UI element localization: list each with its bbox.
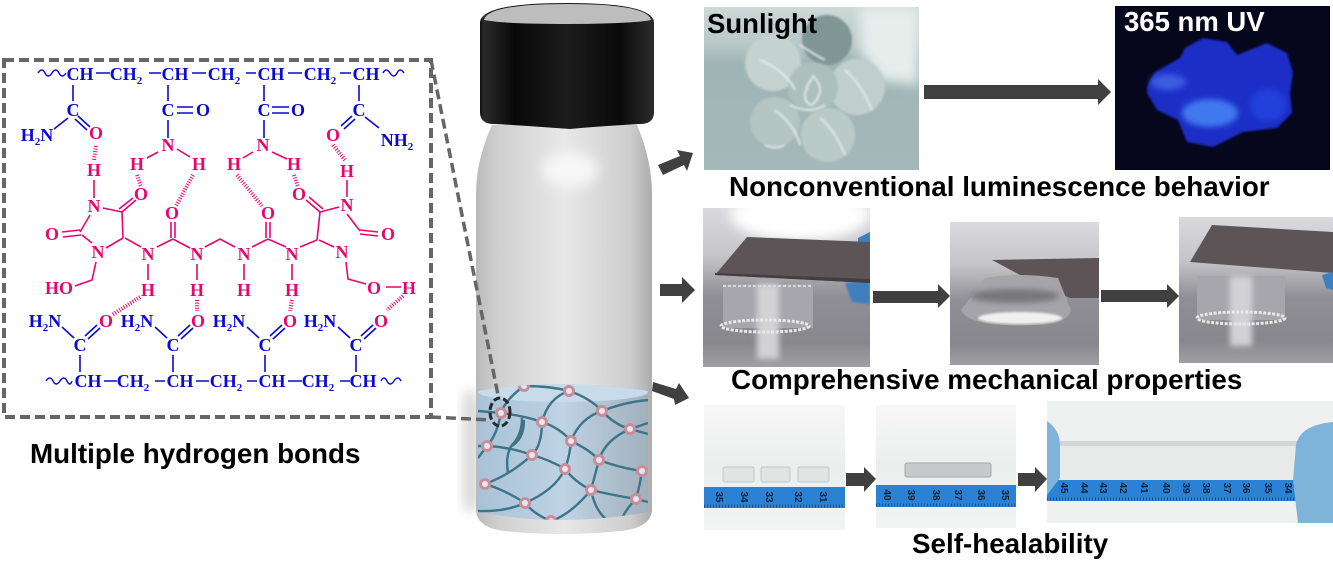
pink crosslinker with hydrogen bonds: O xyxy=(45,224,59,244)
blue upper polymer chain: 2 xyxy=(235,75,241,87)
pink crosslinker with hydrogen bonds: O xyxy=(165,203,179,223)
blue upper polymer chain: C xyxy=(66,100,80,120)
blue upper polymer chain: 2 xyxy=(137,75,143,87)
blue lower polymer chain: C xyxy=(166,335,180,355)
ruler strip: 35 xyxy=(1262,482,1273,494)
blue lower polymer chain: CH xyxy=(350,371,376,391)
blue upper polymer chain: C xyxy=(258,100,270,120)
ruler strip: 44 xyxy=(1078,482,1089,494)
ruler strip: 35 xyxy=(713,491,724,503)
ruler strip: 37 xyxy=(1221,482,1232,494)
ruler strip xyxy=(1047,480,1296,501)
ruler strip: 42 xyxy=(1117,482,1128,494)
blue lower polymer chain: CH xyxy=(210,371,237,391)
blue upper polymer chain: 2 xyxy=(331,75,337,87)
blue lower polymer chain: 2 xyxy=(144,382,150,394)
pink crosslinker with hydrogen bonds: H xyxy=(227,154,241,174)
ruler strip: 31 xyxy=(817,491,828,503)
blue lower polymer chain: O xyxy=(374,311,388,331)
label: sunlight: Sunlight xyxy=(707,8,817,39)
blue lower polymer chain: 2 xyxy=(43,322,49,334)
pink crosslinker with hydrogen bonds: N xyxy=(88,196,100,216)
ruler strip: 32 xyxy=(792,491,803,503)
blue lower polymer chain xyxy=(29,311,401,394)
blue upper polymer chain: 2 xyxy=(408,141,414,153)
blue lower polymer chain: H xyxy=(213,311,227,331)
blue lower polymer chain: 2 xyxy=(329,382,335,394)
bright backdrop xyxy=(860,7,919,85)
blue lower polymer chain: C xyxy=(74,335,86,355)
vial illustration xyxy=(464,3,654,534)
panel: self-healing photo 2 xyxy=(876,405,1016,528)
blue lower polymer chain: CH xyxy=(302,371,329,391)
pink crosslinker with hydrogen bonds: N xyxy=(256,135,270,155)
glowing flower xyxy=(1147,38,1293,147)
label: 365 nm UV: 365 nm UV xyxy=(1124,6,1265,37)
pink crosslinker with hydrogen bonds: N xyxy=(286,244,298,264)
pink crosslinker with hydrogen bonds: N xyxy=(162,135,174,155)
arrow: vial to self-healing xyxy=(652,382,689,405)
blue lower polymer chain: CH xyxy=(117,371,144,391)
arrow: vial to mechanical xyxy=(660,277,695,303)
flower detail strokes xyxy=(760,45,872,155)
arrow: healing 2 to 3 xyxy=(1018,467,1047,492)
blue lower polymer chain: H xyxy=(29,311,43,331)
blue lower polymer chain: H xyxy=(304,311,318,331)
pink crosslinker with hydrogen bonds: H xyxy=(340,161,354,181)
vial highlight xyxy=(542,152,598,188)
arrow: healing 1 to 2 xyxy=(846,467,876,492)
blue upper polymer chain: C xyxy=(162,100,174,120)
ruler strip: 34 xyxy=(738,491,749,503)
blue upper polymer chain: O xyxy=(196,100,210,120)
pink crosslinker with hydrogen bonds: O xyxy=(89,123,103,143)
ruler strip: 41 xyxy=(1138,482,1149,494)
ruler strip xyxy=(704,487,845,508)
ruler strip: 39 xyxy=(905,489,916,501)
ruler strip: 37 xyxy=(952,489,963,501)
panel: mechanical photo 3 xyxy=(1179,217,1333,363)
panel: self-healing photo 1 xyxy=(704,405,845,530)
vial shadow xyxy=(464,392,478,510)
blue lower polymer chain: N xyxy=(232,311,245,331)
heading: nonconventional luminescence behavior: Nonconventional luminescence behavior xyxy=(729,171,1270,202)
ruler strip: 40 xyxy=(1160,482,1171,494)
pink crosslinker with hydrogen bonds: H xyxy=(285,280,299,300)
ruler strip: 36 xyxy=(1240,482,1251,494)
hydrogel network xyxy=(478,378,648,528)
blue upper polymer chain: O xyxy=(291,100,305,120)
blue lower polymer chain: N xyxy=(140,311,153,331)
blue lower polymer chain: CH xyxy=(258,371,286,391)
blue upper polymer chain: CH xyxy=(208,64,235,84)
blue lower polymer chain: C xyxy=(350,335,362,355)
pink crosslinker with hydrogen bonds: O xyxy=(292,184,306,204)
ruler strip: 45 xyxy=(1058,482,1069,494)
pink crosslinker with hydrogen bonds: O xyxy=(134,184,148,204)
panel: sunlight photo xyxy=(704,7,919,170)
pink crosslinker with hydrogen bonds: H xyxy=(141,280,155,300)
pink crosslinker with hydrogen bonds: N xyxy=(238,244,250,264)
blue lower polymer chain: O xyxy=(191,311,205,331)
pink crosslinker with hydrogen bonds: H xyxy=(190,280,204,300)
ruler strip: 43 xyxy=(1097,482,1108,494)
blue lower polymer chain: 2 xyxy=(237,382,243,394)
blue upper polymer chain: H xyxy=(21,125,35,145)
pink crosslinker with hydrogen bonds: H xyxy=(237,280,251,300)
ruler strip: 38 xyxy=(930,489,941,501)
flower petals xyxy=(745,15,885,162)
ruler strip: 34 xyxy=(1282,482,1293,494)
callout lines to inset xyxy=(431,60,498,420)
blue upper polymer chain xyxy=(21,64,414,153)
blue upper polymer chain: C xyxy=(352,100,366,120)
blue lower polymer chain: C xyxy=(258,335,272,355)
heading: comprehensive mechanical properties: Comprehensive mechanical properties xyxy=(731,364,1242,395)
pink crosslinker with hydrogen bonds: N xyxy=(190,244,204,264)
blue lower polymer chain: CH xyxy=(74,371,102,391)
panel: mechanical photo 1 xyxy=(703,208,870,367)
blue upper polymer chain: 2 xyxy=(35,136,41,148)
ruler strip: 40 xyxy=(881,489,892,501)
arrow: sunlight to UV xyxy=(924,79,1111,105)
blue upper polymer chain: N xyxy=(40,125,53,145)
ruler strip: 33 xyxy=(763,491,774,503)
blue upper polymer chain: CH xyxy=(66,64,94,84)
heading: multiple hydrogen bonds: Multiple hydrogen bonds xyxy=(30,438,360,469)
arrow: mechanical 1 to 2 xyxy=(873,284,950,308)
pink crosslinker with hydrogen bonds: N xyxy=(336,242,348,262)
pink crosslinker with hydrogen bonds xyxy=(45,123,416,315)
dashed inset frame xyxy=(4,60,431,417)
pink crosslinker with hydrogen bonds: H xyxy=(402,278,416,298)
panel: mechanical photo 2 xyxy=(950,222,1099,365)
pink crosslinker with hydrogen bonds: H xyxy=(192,154,206,174)
blue lower polymer chain: O xyxy=(283,311,297,331)
pink crosslinker with hydrogen bonds: O xyxy=(326,125,340,145)
blue lower polymer chain: O xyxy=(99,311,113,331)
blue upper polymer chain: CH xyxy=(352,64,380,84)
blue upper polymer chain: CH xyxy=(162,64,188,84)
arrow: mechanical 2 to 3 xyxy=(1101,284,1179,308)
panel: UV photo xyxy=(1115,6,1330,170)
pink crosslinker with hydrogen bonds: H xyxy=(87,160,101,180)
blue lower polymer chain: N xyxy=(323,311,336,331)
ruler strip: 38 xyxy=(1200,482,1211,494)
blue lower polymer chain: 2 xyxy=(227,322,233,334)
pink crosslinker with hydrogen bonds: O xyxy=(381,224,395,244)
pink crosslinker with hydrogen bonds: O xyxy=(367,278,381,298)
blue upper polymer chain: CH xyxy=(304,64,331,84)
ruler strip: 35 xyxy=(999,489,1010,501)
arrow: vial to luminescence xyxy=(658,150,693,175)
blue lower polymer chain: CH xyxy=(166,371,194,391)
pink crosslinker with hydrogen bonds: N xyxy=(142,244,154,264)
ruler strip: 39 xyxy=(1180,482,1191,494)
ruler strip: 36 xyxy=(975,489,986,501)
blue lower polymer chain: N xyxy=(48,311,61,331)
blue lower polymer chain: 2 xyxy=(135,322,141,334)
panel: self-healing photo 3 xyxy=(1047,401,1333,523)
vial black cap xyxy=(480,3,654,129)
panel: multiple hydrogen bonds molecular structure xyxy=(4,60,431,417)
blue lower polymer chain: 2 xyxy=(318,322,324,334)
blue upper polymer chain: CH xyxy=(258,64,284,84)
blue lower polymer chain: H xyxy=(121,311,135,331)
ruler strip xyxy=(876,485,1016,507)
pink crosslinker with hydrogen bonds: H xyxy=(130,154,144,174)
blue upper polymer chain: NH xyxy=(381,130,408,150)
pink crosslinker with hydrogen bonds: N xyxy=(92,242,104,262)
blue upper polymer chain: CH xyxy=(110,64,137,84)
heading: self-healability: Self-healability xyxy=(912,528,1109,559)
dashed callout circle xyxy=(490,398,510,426)
pink crosslinker with hydrogen bonds: O xyxy=(261,203,275,223)
vial glass body xyxy=(476,125,652,534)
pink crosslinker with hydrogen bonds: H xyxy=(287,154,301,174)
pink crosslinker with hydrogen bonds: N xyxy=(340,195,354,215)
pink crosslinker with hydrogen bonds: HO xyxy=(45,278,73,298)
